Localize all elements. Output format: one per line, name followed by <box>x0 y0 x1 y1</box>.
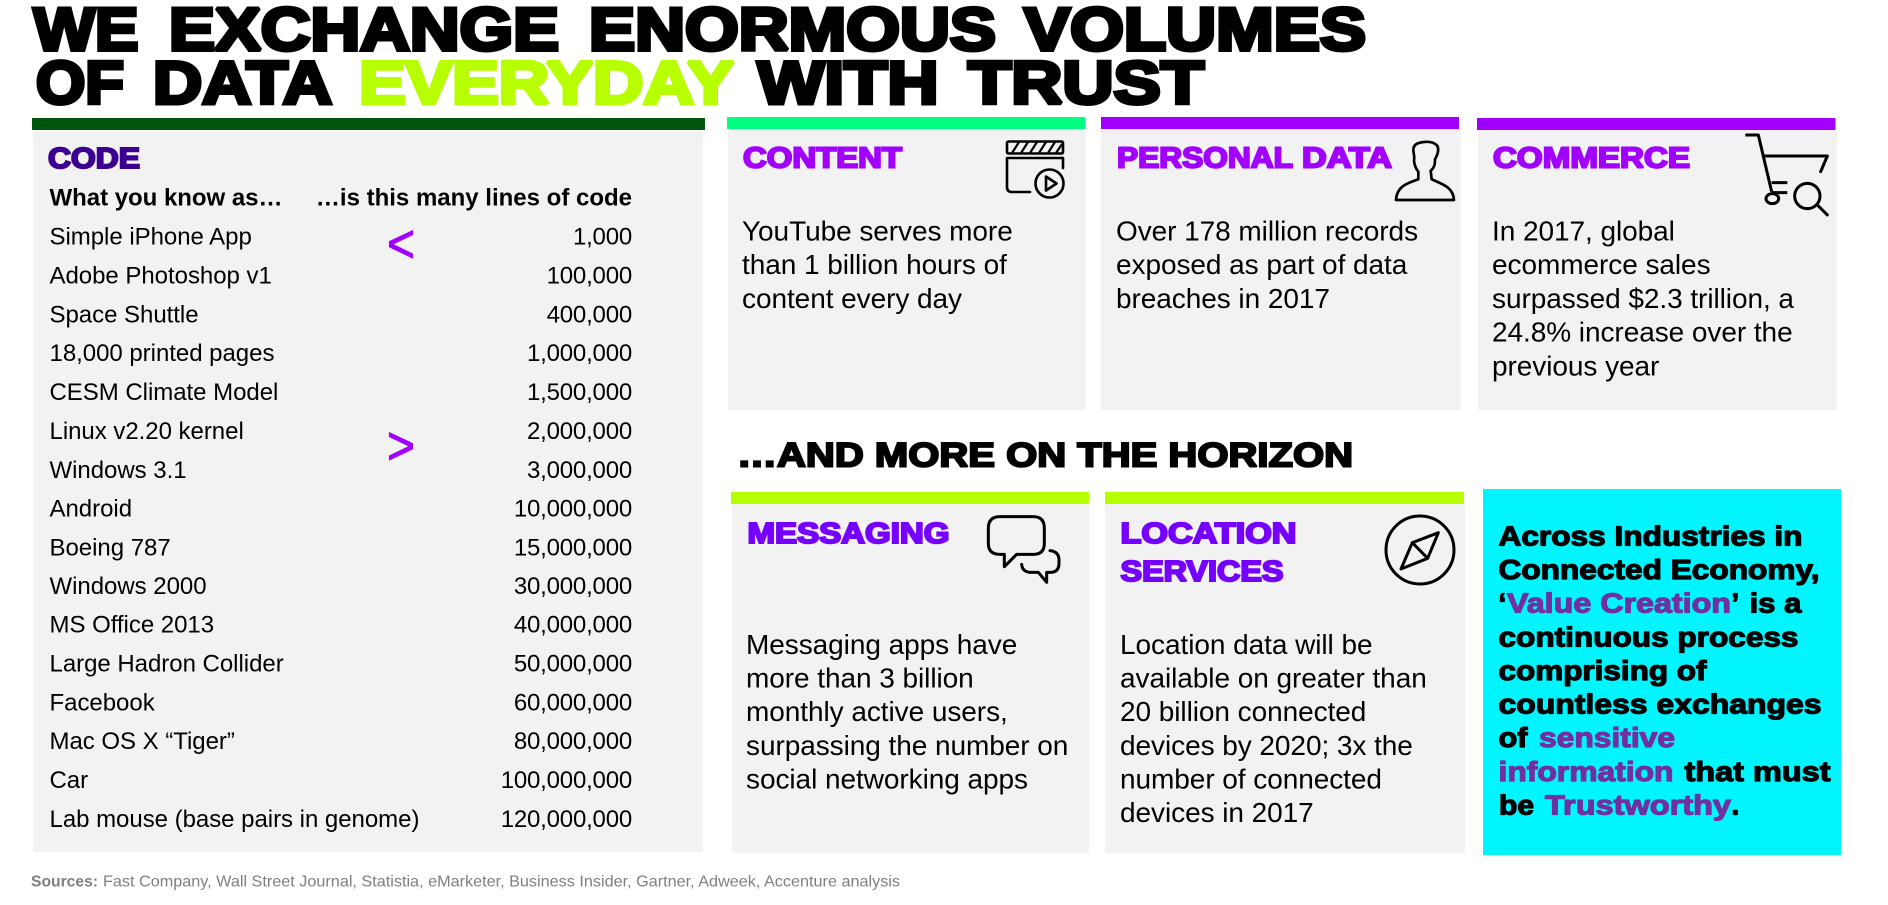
callout text: of <box>1498 722 1528 753</box>
row: MS Office 2013: 40,000,000 <box>514 612 632 638</box>
row: Large Hadron Collider: Large Hadron Collider <box>50 650 284 678</box>
callout text: Connected Economy, <box>1498 554 1820 585</box>
body text: number of connected <box>1120 763 1382 794</box>
panel: code <box>32 118 705 852</box>
body text: YouTube serves more <box>742 216 1013 246</box>
row: CESM Climate Model: CESM Climate Model <box>50 379 278 406</box>
body text: exposed as part of data <box>1116 249 1408 280</box>
row: Simple iPhone App <box>50 224 632 250</box>
callout text: comprising of <box>1498 655 1707 686</box>
row: Facebook <box>50 690 632 716</box>
body text: than 1 billion hours of <box>742 249 1007 280</box>
row: 18,000 printed pages <box>50 340 632 367</box>
callout text: Trustworthy <box>1545 789 1732 820</box>
callout text <box>1498 520 1830 820</box>
callout text: ‘ <box>1498 588 1506 619</box>
icon: compass <box>1386 516 1454 584</box>
row: Simple iPhone App: 1,000 <box>573 224 632 250</box>
panel: messaging <box>731 492 1089 853</box>
body text <box>1120 629 1427 828</box>
row: Facebook: 60,000,000 <box>514 690 632 716</box>
row: 18,000 printed pages: 18,000 printed pages <box>50 340 274 367</box>
body text: Messaging apps have <box>746 629 1017 660</box>
row: Windows 3.1 <box>50 457 632 484</box>
heading: messaging: MESSAGING <box>748 518 950 550</box>
row: CESM Climate Model <box>50 379 632 406</box>
row: Windows 2000: 30,000,000 <box>514 573 632 600</box>
row: 18,000 printed pages: 1,000,000 <box>527 340 632 367</box>
body text: ecommerce sales <box>1492 249 1711 280</box>
row: MS Office 2013: MS Office 2013 <box>50 612 214 638</box>
body text: devices in 2017 <box>1120 797 1314 828</box>
row: Adobe Photoshop v1: Adobe Photoshop v1 <box>50 262 272 290</box>
body text: more than 3 billion <box>746 663 974 694</box>
less-than symbol: < <box>387 214 415 274</box>
heading: code: CODE <box>48 143 140 175</box>
row: Boeing 787 <box>50 534 632 562</box>
icon: chat bubbles <box>988 517 1059 582</box>
greater-than symbol: > <box>387 416 415 476</box>
panel: commerce <box>1477 118 1837 410</box>
row: CESM Climate Model: 1,500,000 <box>527 379 632 406</box>
heading: personal data: PERSONAL <box>1117 142 1293 174</box>
row: Windows 2000: Windows 2000 <box>50 573 207 600</box>
body text: surpassed $2.3 trillion, a <box>1492 283 1794 314</box>
icon: person <box>1396 142 1454 200</box>
title: WITH <box>758 48 938 116</box>
callout text: information <box>1498 756 1674 787</box>
row: Space Shuttle: 400,000 <box>547 302 632 328</box>
callout text: countless exchanges <box>1498 688 1822 720</box>
row: Lab mouse: 120,000,000 <box>501 806 632 833</box>
heading: personal data <box>1117 142 1392 174</box>
body text: 24.8% increase over the <box>1492 317 1793 348</box>
title: EVERYDAY <box>359 48 734 116</box>
panel: personal data <box>1101 117 1461 410</box>
callout text: ’ <box>1732 588 1739 619</box>
table header: …is this many lines of code <box>316 184 632 212</box>
callout text: Across Industries in <box>1498 520 1802 552</box>
row: Android <box>50 496 632 522</box>
sources footnote: Sources: <box>31 874 98 890</box>
row: Mac OS X Tiger: 80,000,000 <box>514 728 632 755</box>
heading: location services: LOCATION <box>1120 518 1296 550</box>
row: Mac OS X Tiger <box>50 728 632 755</box>
title <box>34 0 1366 116</box>
body text: Over 178 million records <box>1116 216 1418 246</box>
icon: video clapper <box>1007 142 1064 198</box>
body text: social networking apps <box>746 763 1028 794</box>
row: Lab mouse: Lab mouse (base pairs in genome) <box>50 806 419 833</box>
row: Facebook: Facebook <box>50 690 156 716</box>
callout text: sensitive <box>1539 722 1675 753</box>
subheading: and more on the horizon: …AND MORE ON THE HORIZON <box>737 437 1353 475</box>
row: Space Shuttle: Space Shuttle <box>50 302 199 328</box>
row: Large Hadron Collider: 50,000,000 <box>514 650 632 678</box>
panel: location services <box>1105 492 1465 853</box>
callout text: Value Creation <box>1507 588 1731 619</box>
title: DATA <box>153 48 332 116</box>
body text: surpassing the number on <box>746 730 1068 761</box>
body text: monthly active users, <box>746 696 1008 727</box>
row: Car: 100,000,000 <box>501 767 632 794</box>
row: Boeing 787: 15,000,000 <box>514 534 632 562</box>
body text: devices by 2020; 3x the <box>1120 730 1413 761</box>
row: Boeing 787: Boeing 787 <box>50 534 171 562</box>
row: Adobe Photoshop v1 <box>50 262 632 290</box>
table header: What you know as… <box>50 184 282 212</box>
body text <box>1492 216 1794 381</box>
title: OF <box>36 48 124 116</box>
heading: location services <box>1120 518 1296 588</box>
sources footnote: Fast Company, Wall Street Journal, Statistia, eMarketer, Business Insider, Gartner, Adweek, Accenture analysis <box>103 874 900 890</box>
row: Android: Android <box>50 496 132 522</box>
row: Linux v2.20 kernel: Linux v2.20 kernel <box>50 418 244 445</box>
body text: available on greater than <box>1120 663 1427 694</box>
icon: cart with magnifier <box>1745 135 1827 215</box>
callout: value creation <box>1483 489 1841 855</box>
row: Adobe Photoshop v1: 100,000 <box>547 262 632 290</box>
row: Lab mouse <box>50 806 632 833</box>
row: Space Shuttle <box>50 302 632 328</box>
title: TRUST <box>968 48 1204 116</box>
heading: location services: SERVICES <box>1120 556 1284 588</box>
row: MS Office 2013 <box>50 612 632 638</box>
row: Linux v2.20 kernel: 2,000,000 <box>527 418 632 445</box>
body text: previous year <box>1492 350 1659 381</box>
body text <box>742 216 1013 314</box>
body text: breaches in 2017 <box>1116 283 1330 314</box>
body text: In 2017, global <box>1492 216 1675 246</box>
heading: personal data: DATA <box>1302 142 1392 174</box>
body text: Location data will be <box>1120 629 1372 660</box>
row: Simple iPhone App: Simple iPhone App <box>50 224 252 250</box>
row: Linux v2.20 kernel <box>50 418 632 445</box>
row: Mac OS X Tiger: Mac OS X “Tiger” <box>50 728 235 755</box>
body text <box>1116 216 1418 314</box>
row: Windows 3.1: Windows 3.1 <box>50 457 187 484</box>
heading: commerce: COMMERCE <box>1493 142 1690 174</box>
row: Large Hadron Collider <box>50 650 632 678</box>
body text: content every day <box>742 283 962 314</box>
table header <box>50 184 632 212</box>
row: Android: 10,000,000 <box>514 496 632 522</box>
body text: 20 billion connected <box>1120 696 1366 727</box>
callout text: is a <box>1750 588 1802 619</box>
callout text: that must <box>1684 756 1830 787</box>
callout text: be <box>1499 789 1534 820</box>
row: Windows 3.1: 3,000,000 <box>527 457 632 484</box>
body text <box>746 629 1068 794</box>
row: Car: Car <box>50 767 88 794</box>
callout text: continuous process <box>1498 621 1798 652</box>
callout text: . <box>1732 789 1739 820</box>
row: Windows 2000 <box>50 573 632 600</box>
row: Car <box>50 767 632 794</box>
heading: content: CONTENT <box>743 142 903 174</box>
panel: content <box>727 117 1086 410</box>
